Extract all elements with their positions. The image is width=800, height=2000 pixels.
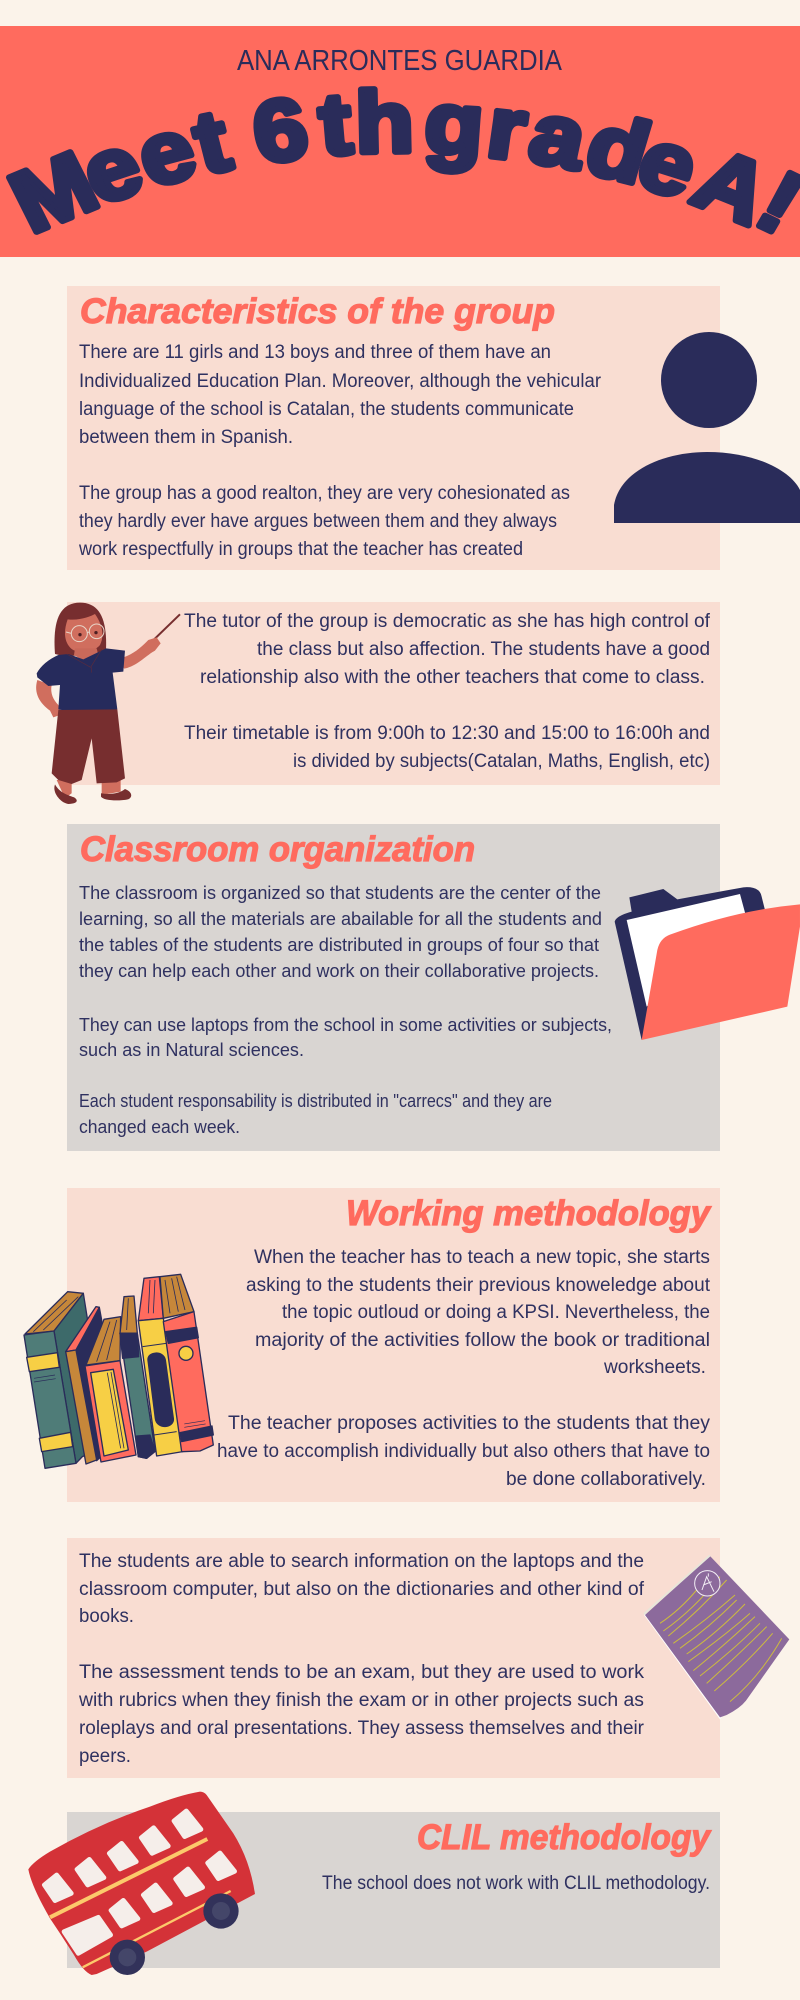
text block: with rubrics when they finish the exam or in other projects such as <box>78 1690 644 1711</box>
icon: double-decker bus <box>28 1792 255 1975</box>
text block: be done collaboratively. <box>506 1469 706 1490</box>
heading: Classroom organization <box>80 830 475 869</box>
text block: relationship also with the other teachers that come to class. <box>200 667 705 688</box>
text block: learning, so all the materials are abailable for all the students and <box>79 908 602 929</box>
panel: classroom organization <box>67 824 800 1151</box>
text block <box>78 342 602 560</box>
text block: worksheets. <box>603 1357 706 1378</box>
text block: The classroom is organized so that students are the center of the <box>79 882 601 903</box>
text block: they can help each other and work on their collaborative projects. <box>79 960 599 981</box>
text block <box>217 1247 711 1490</box>
text block: the tables of the students are distributed in groups of four so that <box>79 934 599 955</box>
text block: When the teacher has to teach a new topic, she starts <box>254 1247 710 1268</box>
text block: The teacher proposes activities to the students that they <box>228 1413 710 1434</box>
text block: Each student responsability is distributed in "carrecs" and they are <box>79 1090 552 1111</box>
text block: Their timetable is from 9:00h to 12:30 and 15:00 to 16:00h and <box>184 723 710 744</box>
text block <box>184 611 711 772</box>
panel: working methodology <box>24 1188 720 1502</box>
icon: folder <box>615 887 800 1040</box>
text block: they hardly ever have argues between them and they always <box>79 511 557 532</box>
text block: The group has a good realton, they are very cohesionated as <box>79 483 570 504</box>
text block: language of the school is Catalan, the students communicate <box>79 399 574 420</box>
text block: roleplays and oral presentations. They assess themselves and their <box>79 1718 645 1739</box>
heading: CLIL methodology <box>417 1818 711 1857</box>
text block: Individualized Education Plan. Moreover, although the vehicular <box>79 371 602 392</box>
panel: CLIL methodology <box>28 1792 720 1975</box>
icon: books <box>24 1274 213 1468</box>
author name: ANA ARRONTES GUARDIA <box>237 45 563 77</box>
text block: books. <box>79 1606 134 1627</box>
panel: search and assessment <box>67 1538 789 1778</box>
panel: characteristics of the group <box>67 286 800 570</box>
text block: changed each week. <box>79 1116 240 1137</box>
text block: work respectfully in groups that the teacher has created <box>78 539 523 560</box>
header banner <box>0 26 800 257</box>
text block: asking to the students their previous knoweledge about <box>246 1275 711 1296</box>
text block: There are 11 girls and 13 boys and three of them have an <box>79 342 551 363</box>
text block: peers. <box>79 1746 131 1767</box>
icon: person <box>614 332 800 523</box>
text block <box>79 882 612 1137</box>
text block: The assessment tends to be an exam, but they are used to work <box>79 1662 645 1683</box>
text block: such as in Natural sciences. <box>79 1039 304 1060</box>
title: Meet 6th grade A! <box>0 73 800 252</box>
heading: Characteristics of the group <box>80 292 555 331</box>
text block: majority of the activities follow the book or traditional <box>255 1330 710 1351</box>
text block: They can use laptops from the school in some activities or subjects, <box>79 1014 612 1035</box>
text block: the topic outloud or doing a KPSI. Nevertheless, the <box>282 1302 710 1323</box>
text block <box>78 1551 645 1767</box>
text block: is divided by subjects(Catalan, Maths, English, etc) <box>293 751 710 772</box>
text block: The school does not work with CLIL methodology. <box>322 1873 710 1894</box>
icon: teacher with pointer <box>36 603 180 804</box>
text block: The students are able to search information on the laptops and the <box>79 1551 644 1572</box>
panel: tutor and timetable <box>36 602 720 804</box>
text block: classroom computer, but also on the dictionaries and other kind of <box>79 1579 645 1600</box>
text block: between them in Spanish. <box>79 427 293 448</box>
text block: have to accomplish individually but also others that have to <box>217 1441 710 1462</box>
text block: the class but also affection. The students have a good <box>257 639 710 660</box>
text block: The tutor of the group is democratic as she has high control of <box>184 611 711 632</box>
heading: Working methodology <box>346 1194 711 1233</box>
icon: graded paper <box>644 1555 789 1719</box>
